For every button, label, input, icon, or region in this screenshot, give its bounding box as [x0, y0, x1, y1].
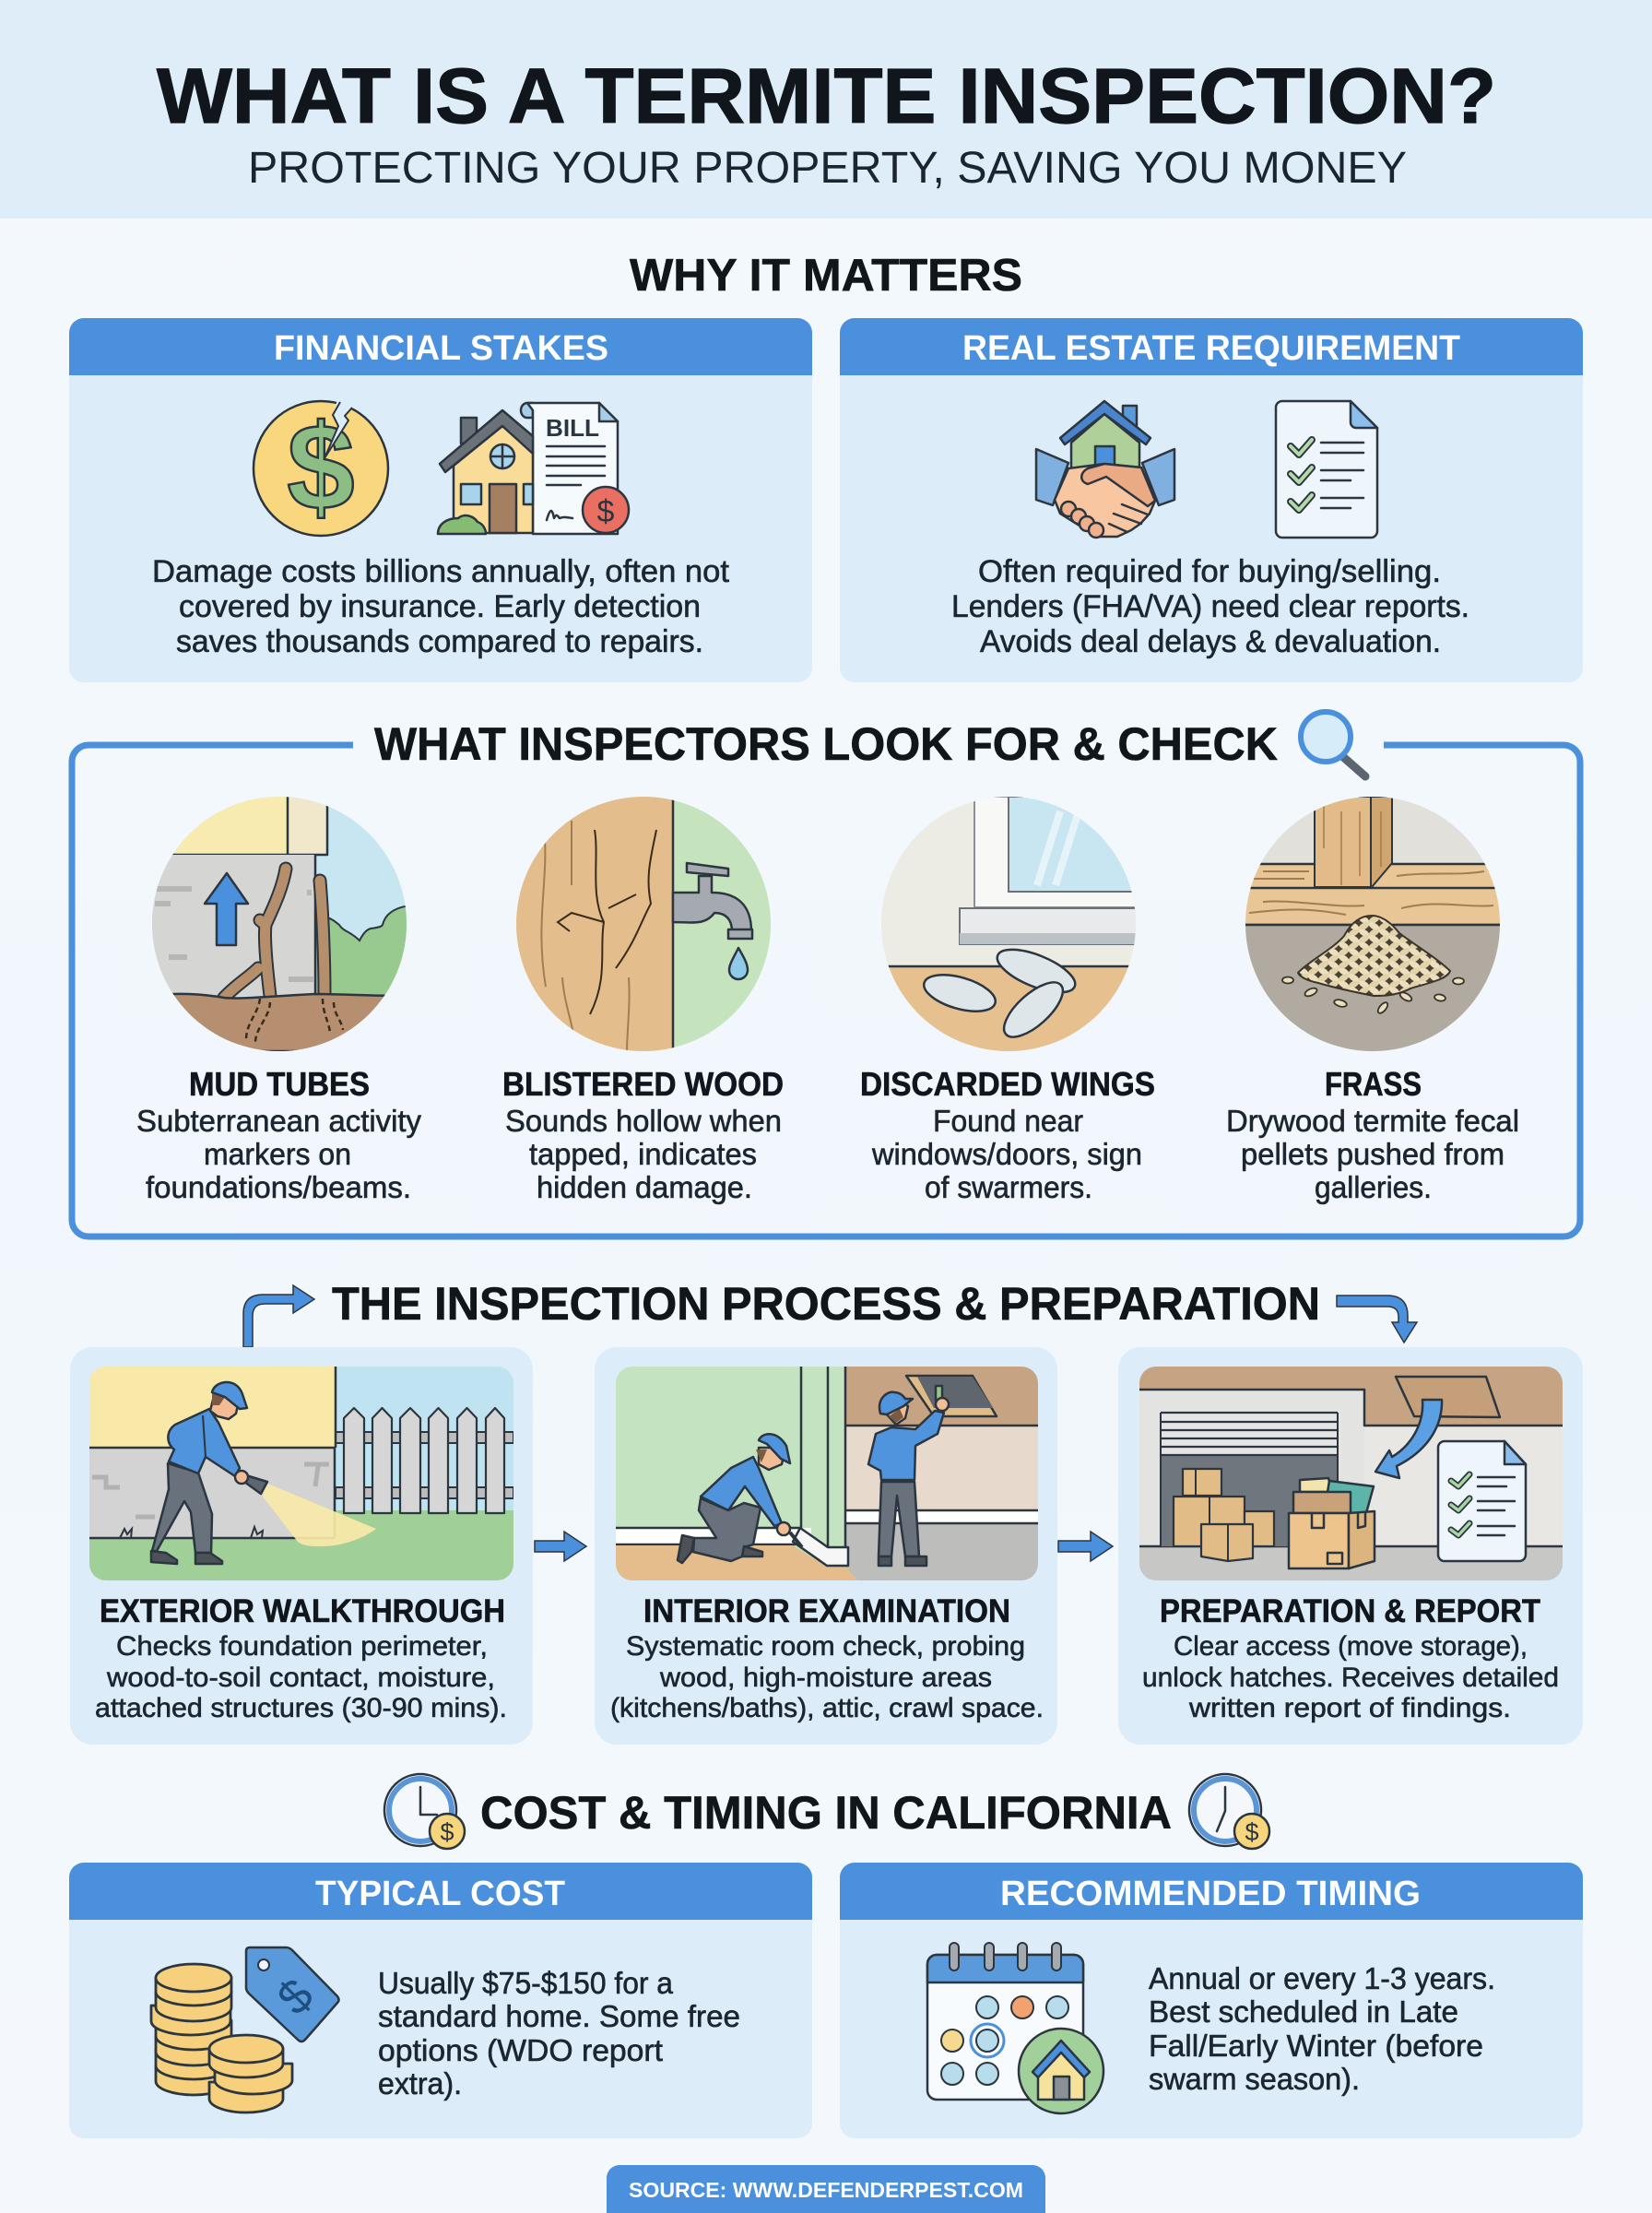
text block: Systematic room check, probing: [626, 1631, 1025, 1662]
icon: cracked dollar coin: $: [287, 399, 355, 535]
illustration: inspectors indoors: [616, 1367, 1038, 1580]
text block: Clear access (move storage),: [1174, 1631, 1528, 1662]
subtitle: PROTECTING YOUR PROPERTY, SAVING YOU MONEY: [248, 144, 1407, 193]
illustration: discarded wings: [881, 797, 1140, 1051]
text block: (kitchens/baths), attic, crawl space.: [610, 1693, 1044, 1723]
item: mud tubes: MUD TUBES: [189, 1065, 370, 1103]
panel heading: RECOMMENDED TIMING: [1000, 1875, 1421, 1913]
item: discarded wings: Found near: [933, 1104, 1083, 1138]
item: frass: pellets pushed from: [1241, 1137, 1504, 1171]
body text: saves thousands compared to repairs.: [176, 624, 703, 659]
icon: clock with coin, left: $: [440, 1818, 454, 1846]
body text: [951, 554, 1469, 659]
body text: swarm season).: [1149, 2062, 1360, 2096]
item: frass: galleries.: [1315, 1170, 1432, 1204]
icon: magnifying glass: [1301, 712, 1365, 776]
body text: standard home. Some free: [378, 1999, 740, 2033]
item: blistered wood: BLISTERED WOOD: [502, 1065, 784, 1103]
icon: checklist document: [1276, 401, 1377, 538]
illustration: mud tubes: [152, 797, 410, 1051]
item: frass: [1226, 1065, 1519, 1204]
item: discarded wings: windows/doors, sign: [871, 1137, 1142, 1171]
footer source badge: SOURCE: WWW.DEFENDERPEST.COM: [629, 2178, 1023, 2202]
panel: exterior walkthrough: [70, 1347, 533, 1745]
icon: clock with coin, right: $: [1245, 1818, 1259, 1846]
icon: clock with coin, right: [1189, 1774, 1269, 1849]
heading: why it matters: WHY IT MATTERS: [630, 251, 1022, 301]
panel: typical cost: [69, 1863, 812, 2138]
panel: what inspectors look for: [72, 712, 1580, 1237]
icon: handshake under house: [1036, 401, 1174, 538]
item: blistered wood: Sounds hollow when: [505, 1104, 782, 1138]
item: discarded wings: DISCARDED WINGS: [860, 1065, 1155, 1103]
illustration: frass: [1245, 797, 1500, 1054]
body text: [152, 554, 730, 659]
body text: Best scheduled in Late: [1149, 1994, 1458, 2029]
arrow: out of process heading: [1337, 1296, 1417, 1343]
body text: options (WDO report: [378, 2033, 663, 2067]
panel: real estate requirement: [840, 318, 1583, 682]
title: WHAT IS A TERMITE INSPECTION?: [157, 53, 1496, 139]
arrow: step 1 to 2: [535, 1532, 586, 1561]
item: discarded wings: of swarmers.: [925, 1170, 1092, 1204]
icon: coins and price tag: $: [267, 1969, 324, 2025]
panel: preparation and report: [1118, 1347, 1583, 1745]
text block: attached structures (30-90 mins).: [95, 1693, 507, 1723]
body text: covered by insurance. Early detection: [179, 589, 701, 624]
body text: Fall/Early Winter (before: [1149, 2029, 1483, 2063]
item: mud tubes: markers on: [204, 1137, 351, 1171]
item: mud tubes: Subterranean activity: [136, 1104, 421, 1138]
arrow: into process heading: [243, 1285, 314, 1347]
panel heading: TYPICAL COST: [315, 1875, 565, 1913]
body text: Annual or every 1-3 years.: [1149, 1961, 1495, 1995]
heading: cost and timing: COST & TIMING IN CALIFORNIA: [480, 1787, 1172, 1839]
body text: Lenders (FHA/VA) need clear reports.: [951, 589, 1469, 624]
section heading: WHAT INSPECTORS LOOK FOR & CHECK: [374, 718, 1278, 770]
item: blistered wood: [502, 1065, 784, 1204]
heading: inspection process: THE INSPECTION PROCESS & PREPARATION: [332, 1278, 1320, 1330]
panel heading: REAL ESTATE REQUIREMENT: [962, 329, 1460, 368]
text block: written report of findings.: [1188, 1693, 1511, 1723]
arrow: step 2 to 3: [1058, 1532, 1113, 1561]
header band: [0, 0, 1652, 219]
text block: EXTERIOR WALKTHROUGH: [100, 1593, 505, 1629]
body text: Avoids deal delays & devaluation.: [980, 624, 1441, 659]
text block: INTERIOR EXAMINATION: [643, 1593, 1010, 1629]
icon: calendar with house: [927, 1943, 1103, 2113]
panel: financial stakes: [69, 318, 812, 682]
text block: wood-to-soil contact, moisture,: [106, 1663, 495, 1693]
body text: extra).: [378, 2066, 462, 2101]
text block: [95, 1593, 507, 1723]
icon: house and bill: $: [597, 494, 615, 529]
body text: [1149, 1961, 1495, 2096]
text block: unlock hatches. Receives detailed: [1142, 1663, 1559, 1693]
text block: PREPARATION & REPORT: [1160, 1593, 1540, 1629]
item: frass: Drywood termite fecal: [1226, 1104, 1519, 1138]
item: discarded wings: [860, 1065, 1155, 1204]
text block: Checks foundation perimeter,: [116, 1631, 488, 1662]
item: mud tubes: [136, 1065, 421, 1204]
illustration: blistered wood: [516, 797, 771, 1051]
body text: Usually $75-$150 for a: [378, 1966, 674, 2000]
item: mud tubes: foundations/beams.: [146, 1170, 411, 1204]
panel: interior examination: [595, 1347, 1057, 1745]
icon: clock with coin, left: [384, 1774, 465, 1849]
icon: coins and price tag: [151, 1947, 339, 2112]
panel heading: FINANCIAL STAKES: [274, 329, 608, 368]
footer source badge: [607, 2165, 1045, 2213]
panel: recommended timing: [840, 1863, 1583, 2138]
item: blistered wood: hidden damage.: [537, 1170, 752, 1204]
illustration: inspector with flashlight: [89, 1367, 513, 1580]
body text: [378, 1966, 740, 2101]
illustration: garage storage and report: [1139, 1367, 1563, 1580]
text block: [610, 1593, 1044, 1723]
body text: Often required for buying/selling.: [978, 554, 1441, 589]
item: frass: FRASS: [1325, 1065, 1422, 1103]
item: blistered wood: tapped, indicates: [529, 1137, 757, 1171]
icon: house and bill: BILL: [546, 414, 599, 442]
text block: [1142, 1593, 1559, 1723]
body text: Damage costs billions annually, often not: [152, 554, 730, 589]
icon: house and bill: [438, 403, 629, 534]
icon: cracked dollar coin: [254, 395, 388, 536]
text block: wood, high-moisture areas: [659, 1663, 992, 1693]
